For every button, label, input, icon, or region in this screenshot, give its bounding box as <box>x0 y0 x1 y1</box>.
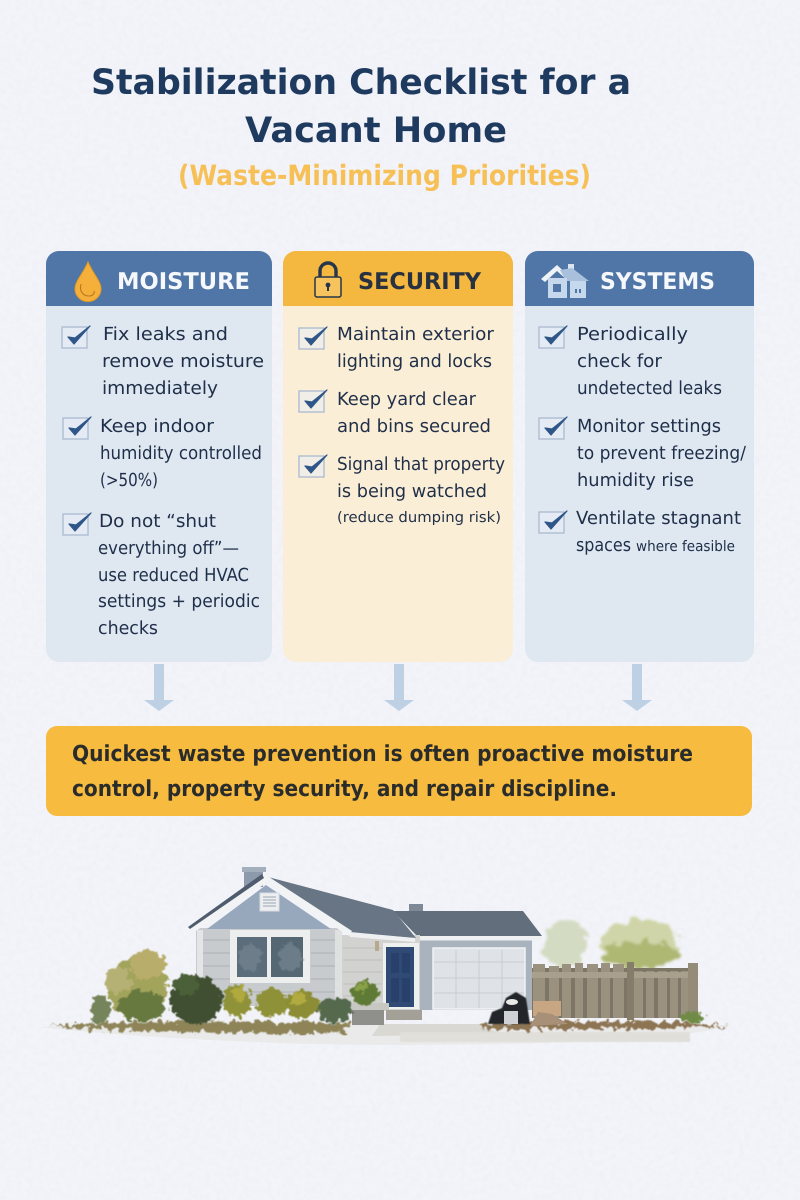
fence <box>532 962 698 1020</box>
moisture item 2 <box>63 416 262 491</box>
security item 2: Keep yard clear <box>337 389 477 410</box>
moisture item 3 <box>63 511 260 639</box>
systems header <box>525 251 754 306</box>
systems heading: SYSTEMS <box>600 269 715 295</box>
icon: houses <box>541 264 589 298</box>
systems item 2: Monitor settings <box>577 416 721 437</box>
arrow: security to callout <box>384 664 414 711</box>
security item 2 <box>299 389 491 437</box>
moisture item 1: remove moisture <box>102 351 264 372</box>
panel: security <box>283 251 513 662</box>
systems item 2: to prevent freezing/ <box>577 443 747 464</box>
main house wall <box>196 928 420 1011</box>
callout: Quickest waste prevention is often proactive moisture <box>72 742 693 767</box>
security item 1: Maintain exterior <box>337 324 495 345</box>
security item 3: is being watched <box>337 481 487 502</box>
systems item 1: undetected leaks <box>577 378 722 399</box>
systems item 2 <box>539 416 747 491</box>
systems item 2: humidity rise <box>577 470 694 491</box>
systems item 1: check for <box>577 351 663 372</box>
yard debris <box>488 992 704 1026</box>
moisture heading: MOISTURE <box>117 269 250 295</box>
arrow: moisture to callout <box>144 664 174 711</box>
panel: moisture <box>46 251 272 662</box>
moisture item 3: checks <box>98 618 158 639</box>
title: Stabilization Checklist for a <box>91 63 631 103</box>
icon: padlock <box>315 263 341 297</box>
illustration: vacant house and overgrown yard <box>40 867 730 1045</box>
moisture header <box>46 251 272 306</box>
moisture item 1: immediately <box>102 378 218 399</box>
lawn and debris strips <box>50 1021 728 1033</box>
security item 3 <box>299 454 505 526</box>
subtitle: (Waste-Minimizing Priorities) <box>178 159 591 192</box>
left shrubs <box>90 950 352 1024</box>
moisture item 1: Fix leaks and <box>103 324 228 345</box>
security heading: SECURITY <box>358 269 481 295</box>
moisture item 2: (>50%) <box>100 470 158 491</box>
systems item 3: where feasible <box>636 539 735 555</box>
systems item 3 <box>539 508 741 556</box>
systems item 1 <box>539 324 722 399</box>
moisture item 1 <box>62 324 264 399</box>
moisture item 3: settings + periodic <box>98 591 260 612</box>
background trees <box>543 919 680 971</box>
moisture item 3: everything off”— <box>98 538 239 559</box>
systems item 3: Ventilate stagnant <box>576 508 741 529</box>
icon: water drop <box>75 262 101 302</box>
security item 1 <box>299 324 495 372</box>
security item 1: lighting and locks <box>337 351 492 372</box>
moisture item 2: humidity controlled <box>100 443 262 464</box>
panel: systems <box>525 251 754 662</box>
security item 3: (reduce dumping risk) <box>337 510 501 526</box>
chimney <box>242 867 266 887</box>
main roof <box>268 877 416 938</box>
gable <box>188 874 415 942</box>
moisture item 3: Do not “shut <box>99 511 216 532</box>
systems item 1: Periodically <box>577 324 688 345</box>
steps <box>386 1010 422 1020</box>
security header <box>283 251 513 306</box>
planter <box>347 981 389 1025</box>
systems item 3: spaces <box>576 535 631 556</box>
callout: control, property security, and repair discipline. <box>72 777 617 802</box>
title <box>91 63 631 151</box>
security item 3: Signal that property <box>337 454 505 475</box>
title: Vacant Home <box>245 111 507 151</box>
window <box>230 930 310 983</box>
callout <box>46 726 752 816</box>
moisture item 2: Keep indoor <box>100 416 215 437</box>
door <box>375 941 419 1009</box>
arrow: systems to callout <box>622 664 652 711</box>
security item 2: and bins secured <box>337 416 491 437</box>
moisture item 3: use reduced HVAC <box>98 565 249 586</box>
garage <box>393 904 542 1010</box>
ground and driveway <box>40 1024 730 1045</box>
